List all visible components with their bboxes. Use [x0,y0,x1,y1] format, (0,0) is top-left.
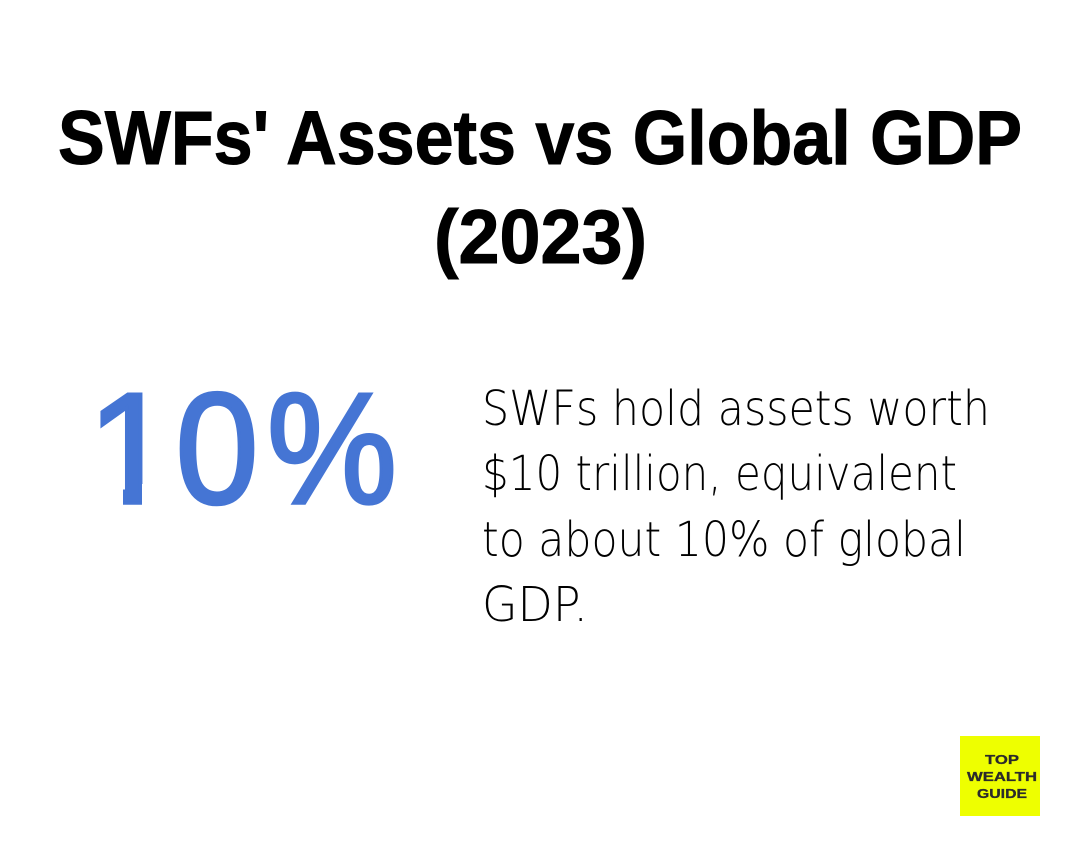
title [58,96,1022,280]
title: (2023) [434,195,647,280]
description text [482,381,990,633]
logo: Top Wealth Guide [960,736,1040,816]
big statistic: 10%: 0 [176,361,258,537]
description text: GDP. [482,577,588,633]
big statistic: 10%: % [267,361,397,537]
description text: SWFs hold assets worth [482,381,990,437]
logo: Top Wealth Guide: GUIDE [977,787,1027,801]
title: SWFs' Assets vs Global GDP [58,96,1022,181]
logo: Top Wealth Guide: WEALTH [967,770,1037,784]
description text: to about 10% of global [482,512,966,568]
description text: $10 trillion, equivalent [482,446,957,502]
big statistic: 10%: 1 [87,361,175,537]
big statistic: 10% [87,361,397,537]
logo: Top Wealth Guide: TOP [985,753,1019,767]
